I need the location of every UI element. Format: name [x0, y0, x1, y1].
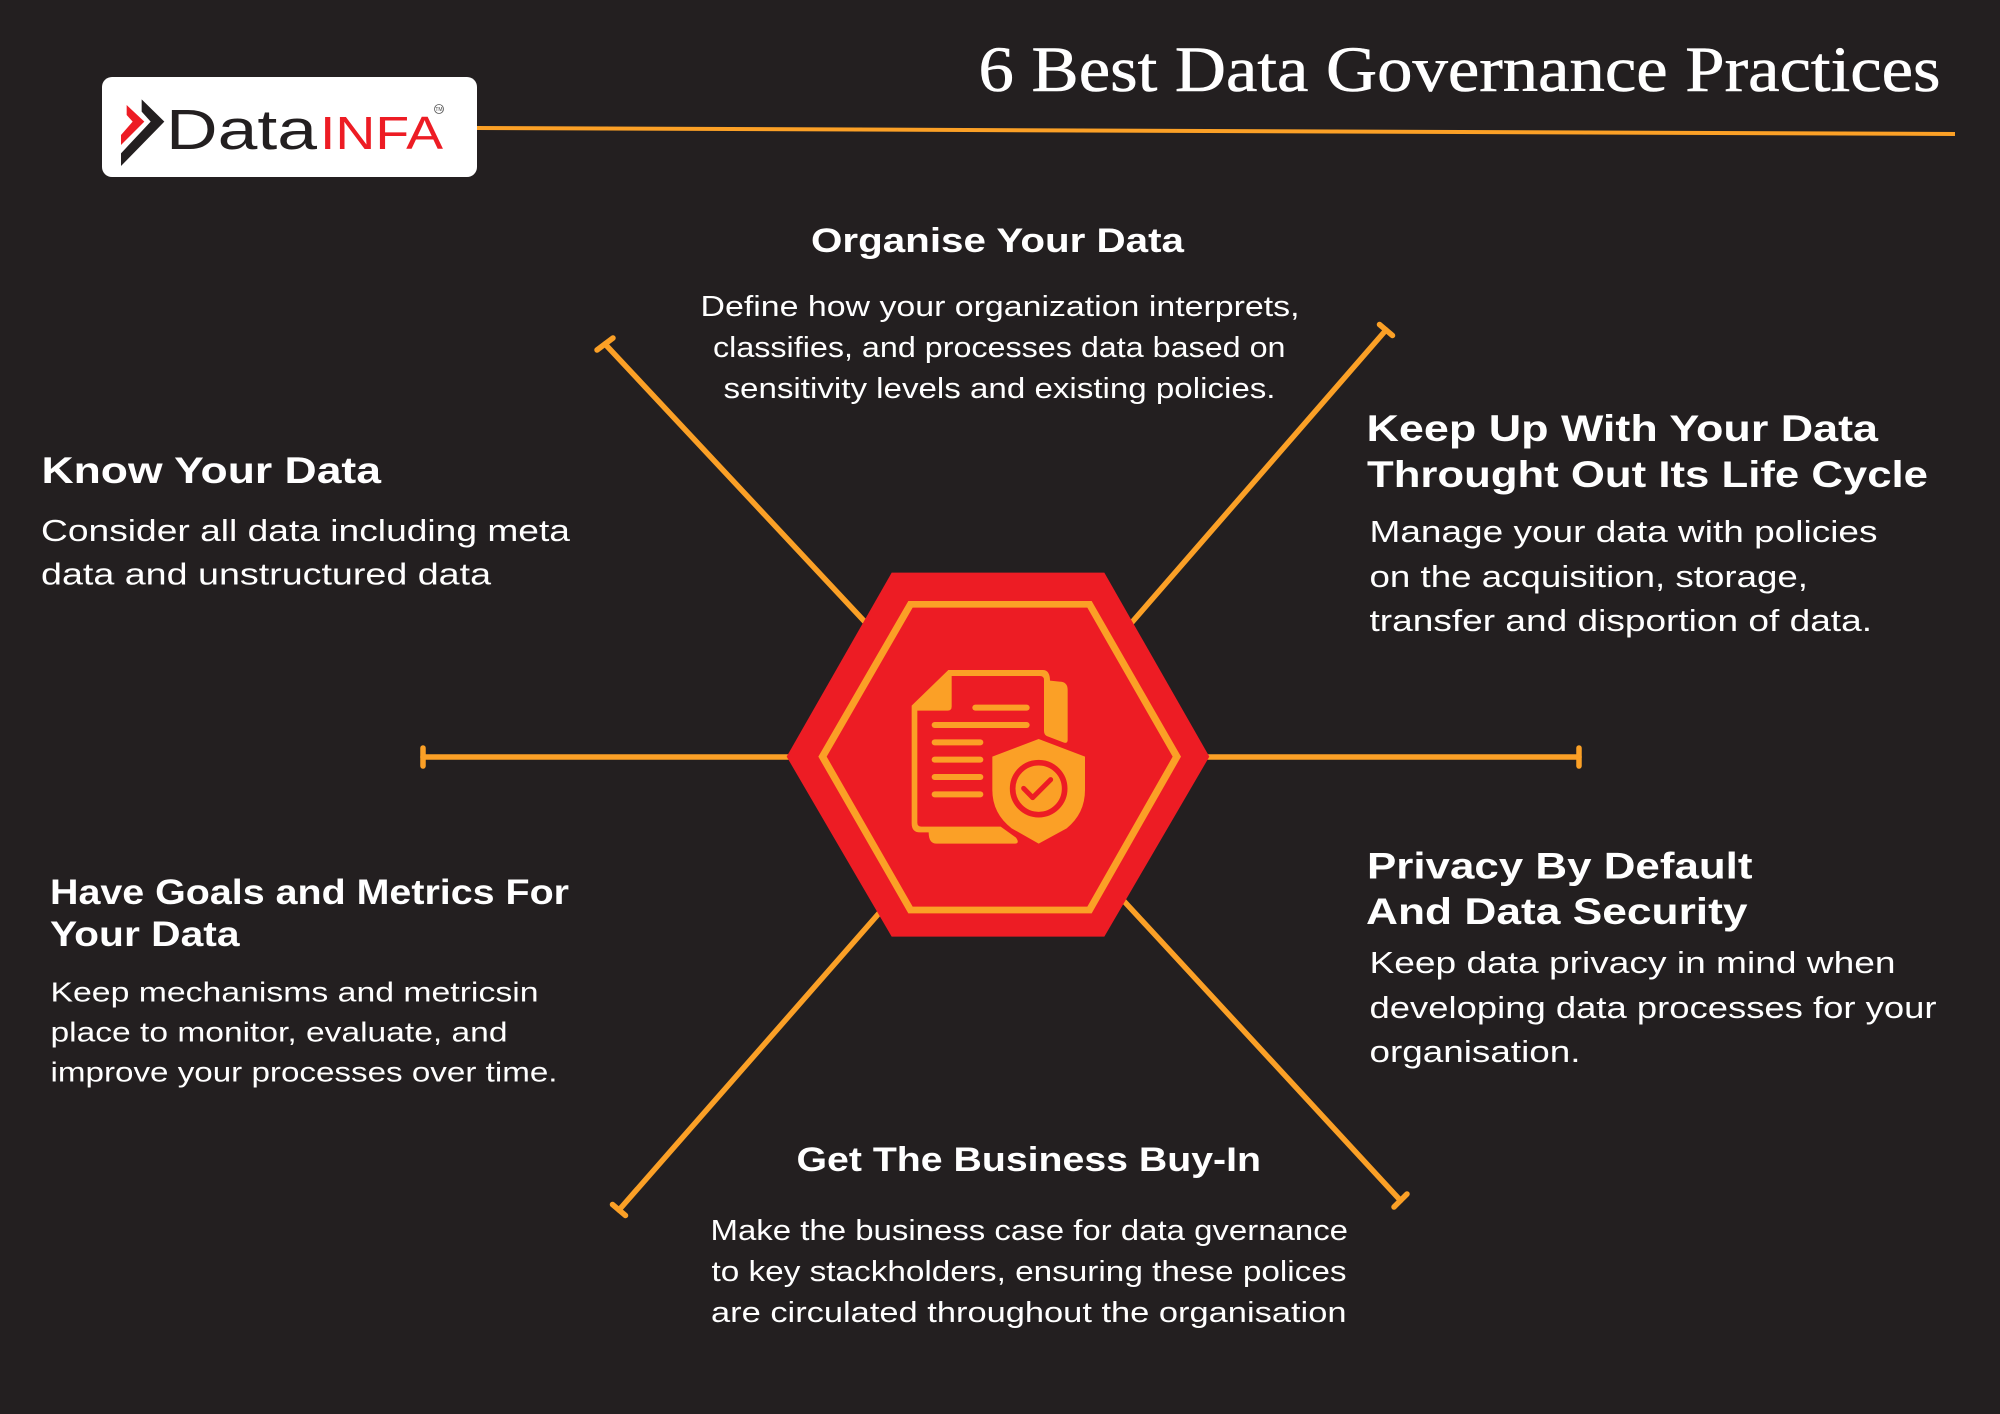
- body text: place to monitor, evaluate, and: [50, 1016, 507, 1048]
- logo wordmark: Data: [166, 98, 317, 162]
- trademark mark: [434, 104, 444, 114]
- icon: shield badge: [1013, 763, 1065, 815]
- panel: Keep Up With Your Data: [1366, 408, 1928, 638]
- body text: data and unstructured data: [41, 556, 492, 592]
- icon: document with shield: [912, 670, 1085, 844]
- panel: Privacy By Default: [1366, 846, 1936, 1069]
- heading: [50, 873, 569, 954]
- body text: developing data processes for your: [1370, 990, 1936, 1025]
- body text: Consider all data including meta: [41, 513, 571, 548]
- logo: DataINFA: [102, 77, 477, 177]
- panel: Know Your Data: [41, 450, 571, 592]
- body text: Manage your data with policies: [1370, 514, 1878, 549]
- body text: Keep mechanisms and metricsin: [50, 976, 538, 1008]
- icon: check mark: [1024, 780, 1051, 798]
- header rule: [477, 128, 1955, 134]
- body text: [710, 1215, 1348, 1329]
- body text: [700, 291, 1300, 405]
- connector: bottom right: [1110, 886, 1407, 1207]
- icon: document outline: [912, 670, 1068, 844]
- heading: Get The Business Buy-In: [796, 1141, 1261, 1179]
- central hexagon: [787, 573, 1209, 937]
- hexagon inner outline: [818, 601, 1181, 913]
- connector: right: [1195, 748, 1579, 766]
- heading: Keep Up With Your Data: [1366, 408, 1879, 449]
- body text: [41, 513, 571, 592]
- panel: Have Goals and Metrics: [50, 873, 569, 1088]
- heading: Your Data: [50, 915, 240, 954]
- heading: [1366, 846, 1752, 932]
- body text: improve your processes over time.: [50, 1056, 558, 1088]
- heading: Know Your Data: [42, 450, 382, 491]
- heading: And Data Security: [1366, 891, 1748, 932]
- body text: Keep data privacy in mind when: [1370, 945, 1896, 980]
- heading: Privacy By Default: [1367, 846, 1752, 886]
- heading: [1366, 408, 1928, 495]
- icon: shield: [992, 739, 1085, 844]
- body text: [1370, 945, 1936, 1069]
- body text: on the acquisition, storage,: [1370, 559, 1808, 594]
- body text: to key stackholders, ensuring these polices: [712, 1256, 1346, 1288]
- icon: document text lines: [935, 708, 1027, 794]
- panel: Organise Your Data: [700, 222, 1300, 405]
- body text: are circulated throughout the organisation: [711, 1297, 1346, 1329]
- body text: organisation.: [1370, 1034, 1580, 1069]
- body text: transfer and disportion of data.: [1370, 603, 1872, 638]
- heading: Throught Out Its Life Cycle: [1367, 454, 1928, 495]
- connector: bottom left: [612, 895, 895, 1216]
- connector: top right: [1120, 324, 1392, 636]
- body text: Make the business case for data gvernance: [710, 1215, 1348, 1247]
- logo chevrons: [121, 99, 164, 166]
- heading: Organise Your Data: [811, 222, 1185, 260]
- trademark mark: TM: [435, 107, 443, 113]
- body text: classifies, and processes data based on: [713, 332, 1286, 364]
- connector: left: [423, 748, 800, 766]
- body text: Define how your organization interprets,: [700, 291, 1300, 323]
- panel: Get The Business Buy-In: [710, 1141, 1348, 1329]
- connector: top left: [597, 338, 880, 638]
- body text: [50, 976, 558, 1088]
- logo wordmark: INFA: [320, 107, 443, 159]
- heading: Have Goals and Metrics For: [50, 873, 569, 912]
- hexagon fill: [787, 573, 1209, 937]
- title: 6 Best Data Governance Practices: [978, 34, 1940, 106]
- body text: sensitivity levels and existing policies.: [724, 373, 1276, 405]
- body text: [1370, 514, 1878, 638]
